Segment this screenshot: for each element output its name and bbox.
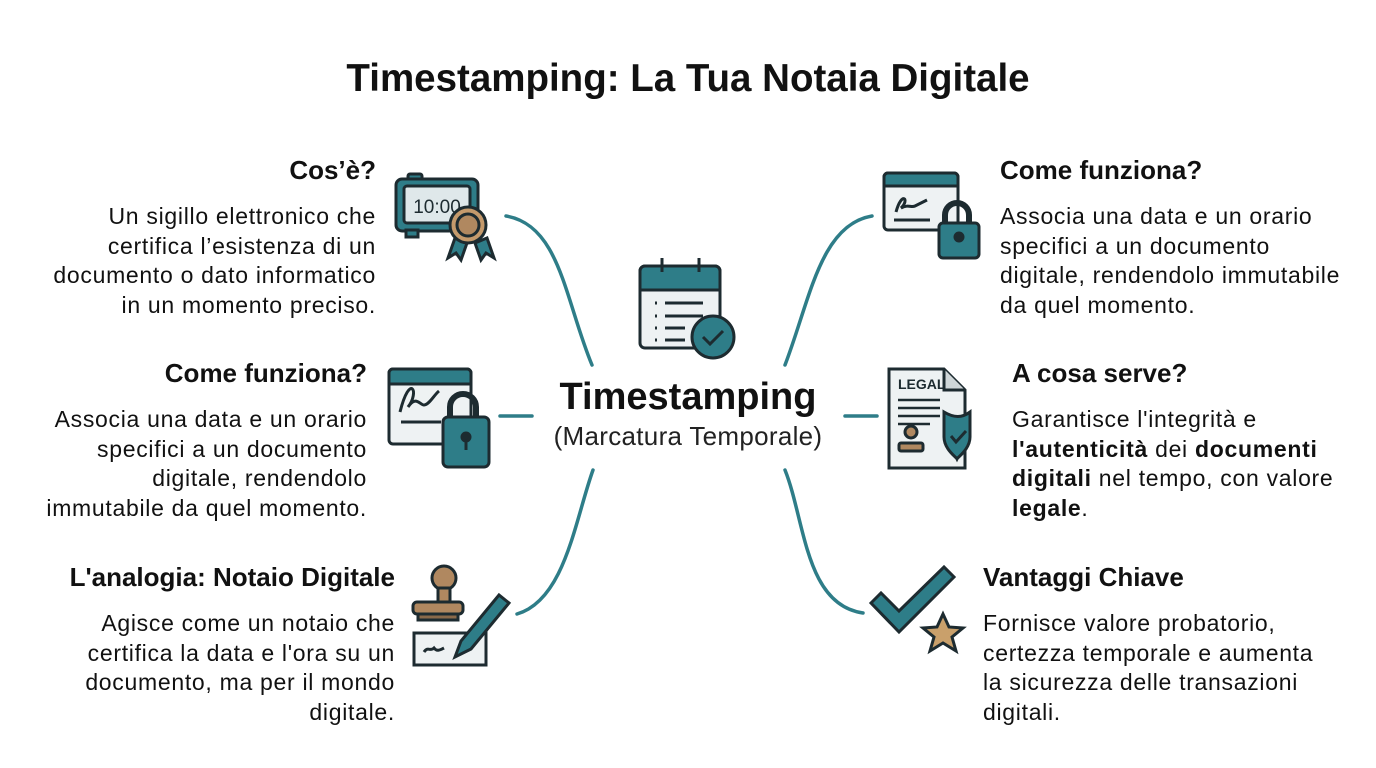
block: cos'è: certifica l’esistenza di un xyxy=(108,233,376,259)
block: a cosa serve xyxy=(1012,358,1333,521)
block: come funziona left xyxy=(46,358,367,521)
block: come funziona left: Associa una data e un orario xyxy=(55,406,367,432)
block: analogia: documento, ma per il mondo xyxy=(85,669,395,695)
center label: Timestamping xyxy=(560,376,816,418)
block: cos'è xyxy=(53,155,376,318)
block: cos'è: Un sigillo elettronico che xyxy=(108,203,376,229)
icon: calendar check xyxy=(640,258,734,358)
icon: clock with badge: 10:00 xyxy=(413,197,461,218)
center label: (Marcatura Temporale) xyxy=(554,421,822,451)
block: vantaggi: certezza temporale e aumenta xyxy=(983,640,1313,666)
icon: legal document with shield xyxy=(889,369,970,468)
block: a cosa serve: l'autenticità dei documenti xyxy=(1012,436,1318,462)
block: analogia: certifica la data e l'ora su un xyxy=(88,640,395,666)
block: come funziona right: digitale, rendendolo immutabile xyxy=(1000,262,1340,288)
block: vantaggi: digitali. xyxy=(983,699,1061,725)
icon: stamp and pen xyxy=(413,566,509,665)
block: vantaggi xyxy=(983,562,1313,725)
block: analogia: Agisce come un notaio che xyxy=(101,610,395,636)
block: cos'è: Cos’è? xyxy=(289,155,376,185)
block: come funziona right: da quel momento. xyxy=(1000,292,1195,318)
block: come funziona right: specifici a un documento xyxy=(1000,233,1270,259)
block: vantaggi: Fornisce valore probatorio, xyxy=(983,610,1275,636)
block: vantaggi: la sicurezza delle transazioni xyxy=(983,669,1298,695)
icon: check and star xyxy=(871,567,963,651)
block: analogia: digitale. xyxy=(309,699,395,725)
block: come funziona left: digitale, rendendolo xyxy=(152,465,367,491)
title: Timestamping: La Tua Notaia Digitale xyxy=(346,57,1030,100)
block: analogia xyxy=(70,562,395,725)
block: come funziona left: immutabile da quel momento. xyxy=(46,495,367,521)
block: come funziona right: Come funziona? xyxy=(1000,155,1202,185)
icon: signed document with lock (left) xyxy=(389,369,489,467)
block: vantaggi: Vantaggi Chiave xyxy=(983,562,1184,592)
block: cos'è: in un momento preciso. xyxy=(122,292,376,318)
block: come funziona right xyxy=(1000,155,1340,318)
icon: legal document with shield: LEGAL xyxy=(898,376,946,392)
block: come funziona left: Come funziona? xyxy=(165,358,367,388)
center label xyxy=(554,376,822,451)
block: a cosa serve: A cosa serve? xyxy=(1012,358,1187,388)
block: analogia: L'analogia: Notaio Digitale xyxy=(70,562,395,592)
block: come funziona left: specifici a un documento xyxy=(97,436,367,462)
block: a cosa serve: legale. xyxy=(1012,495,1088,521)
block: a cosa serve: digitali nel tempo, con valore xyxy=(1012,465,1333,491)
icon: signed document with lock (right) xyxy=(884,173,979,258)
icon: clock with badge xyxy=(396,174,494,260)
block: come funziona right: Associa una data e un orario xyxy=(1000,203,1312,229)
block: a cosa serve: Garantisce l'integrità e xyxy=(1012,406,1257,432)
block: cos'è: documento o dato informatico xyxy=(53,262,376,288)
